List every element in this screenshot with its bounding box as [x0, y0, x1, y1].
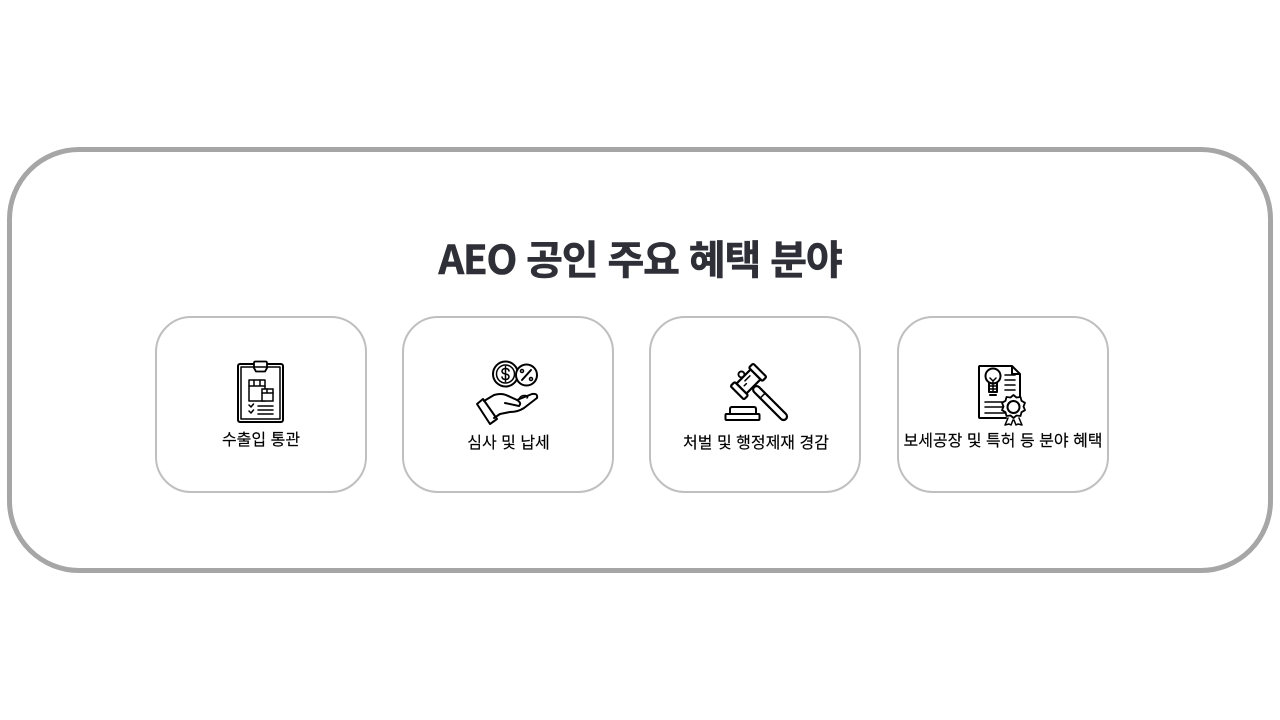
card: audit and tax payment: [402, 316, 614, 493]
card: bonded factory and patents: [897, 316, 1109, 493]
label: customs clearance: 수출입 통관: [222, 426, 300, 450]
card: penalties and sanctions: [649, 316, 861, 493]
label: audit and tax payment: 심사 및 납세: [467, 429, 550, 453]
label: penalties and sanctions: 처벌 및 행정제재 경감: [683, 429, 829, 453]
icon: judge gavel: [726, 361, 797, 430]
title: AEO 공인 주요 혜택 분야: [438, 228, 842, 286]
icon: clipboard with boxes: [238, 362, 283, 422]
icon: hand holding coins: [477, 362, 537, 424]
card: customs clearance: [155, 316, 367, 493]
icon: patent certificate with ribbon: [979, 366, 1025, 425]
label: bonded factory and patents: 보세공장 및 특허 등 분야 혜택: [903, 427, 1103, 451]
outer rounded panel: [7, 147, 1273, 573]
